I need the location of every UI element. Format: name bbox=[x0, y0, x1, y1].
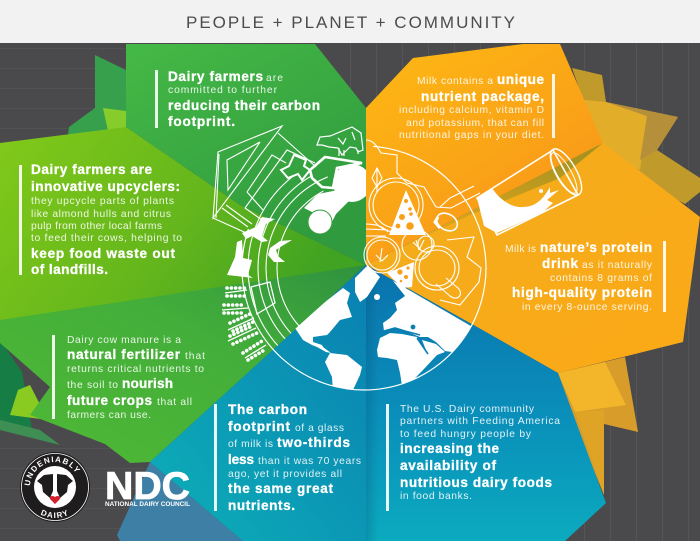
icon: cow in barn bbox=[281, 155, 310, 180]
bar: fertilizer bbox=[52, 335, 55, 419]
globe outer ring bbox=[232, 136, 496, 400]
text: fertilizer: Dairy cow manure is a bbox=[67, 335, 181, 346]
text: upcyclers: Dairy farmers are bbox=[31, 162, 152, 177]
text: upcyclers: pulp from other local farms bbox=[31, 221, 162, 232]
text: fertilizer: the soil to bbox=[67, 380, 118, 391]
text: unique nutrient package: including calcium, vitamin D bbox=[399, 105, 544, 116]
bar: nutrients bbox=[552, 74, 555, 138]
text: upcyclers: like almond hulls and citrus bbox=[31, 209, 171, 220]
text: dairy farmers carbon bbox=[168, 69, 320, 129]
text: feeding america bbox=[400, 404, 560, 502]
text: carbon footprint of milk: the same great bbox=[228, 481, 333, 496]
panel: feeding america blue bbox=[366, 265, 606, 541]
text: feeding america: increasing the bbox=[400, 441, 499, 456]
text: fertilizer bbox=[67, 335, 205, 421]
text: feeding america: to feed hungry people by bbox=[400, 429, 532, 440]
text: upcyclers bbox=[31, 162, 182, 277]
bar: protein bbox=[663, 241, 666, 312]
decorative shards: left bbox=[0, 340, 60, 445]
icon: mushroom bbox=[433, 210, 461, 234]
text: fertilizer: that all bbox=[157, 397, 192, 408]
bar: food banks bbox=[386, 404, 389, 511]
logo: Undeniably Dairy: UNDENIABLY bbox=[24, 456, 80, 486]
icon: milk glass bbox=[477, 144, 588, 235]
text: feeding america: partners with Feeding America bbox=[400, 416, 560, 427]
panel: lime upcycling bbox=[0, 127, 366, 321]
illustration: food plate bbox=[364, 140, 481, 305]
decorative shards: top left bbox=[68, 55, 126, 135]
text: carbon footprint of milk: than it was 70 years bbox=[258, 456, 361, 467]
text: feeding america: in food banks. bbox=[400, 491, 472, 502]
logo: Undeniably Dairy bbox=[20, 452, 90, 522]
small wheel bbox=[308, 210, 332, 234]
bar: footprint bbox=[214, 404, 217, 511]
text: feeding america: The U.S. Dairy community bbox=[400, 404, 535, 415]
icon: tree rows bbox=[222, 288, 266, 360]
bar: dairy farmers bbox=[155, 70, 158, 128]
panel: fertilizer green bbox=[0, 265, 366, 463]
center fold bbox=[366, 265, 378, 541]
bar: upcyclers bbox=[19, 165, 22, 275]
text: unique nutrient package: and potassium, that can fill bbox=[406, 118, 544, 129]
decorative shards: top right bbox=[572, 68, 700, 204]
icon: world globe bbox=[296, 266, 471, 389]
icon: left cows bbox=[227, 217, 292, 314]
text: fertilizer: returns critical nutrients to bbox=[67, 364, 204, 375]
panel: carbon footprint teal bbox=[150, 265, 366, 541]
text: dairy farmers carbon: committed to further bbox=[168, 85, 278, 96]
text: protein drink: contains 8 grams of bbox=[550, 273, 652, 284]
text: upcyclers: of landfills. bbox=[31, 262, 108, 277]
icon: tractor bbox=[304, 157, 371, 222]
text: carbon footprint of milk: footprint bbox=[228, 419, 290, 434]
text: carbon footprint of milk bbox=[228, 402, 361, 513]
panel: upper orange nutrients bbox=[366, 44, 603, 265]
text: upcyclers: to feed their cows, helping to bbox=[31, 233, 182, 244]
text: carbon footprint of milk: of milk is bbox=[228, 439, 273, 450]
text: upcyclers: they upcycle parts of plants bbox=[31, 196, 174, 207]
panel: carbon reduction green bbox=[126, 44, 366, 265]
arcs of the farm half bbox=[248, 176, 328, 346]
text: feeding america: nutritious dairy foods bbox=[400, 475, 552, 490]
text: carbon footprint of milk: of a glass bbox=[295, 423, 344, 434]
text: unique nutrient package: nutritional gaps in your diet. bbox=[399, 130, 544, 141]
text: protein drink bbox=[505, 240, 653, 313]
text: upcyclers: innovative upcyclers: bbox=[31, 179, 180, 194]
decorative shards: bottom right bbox=[558, 357, 638, 495]
text: carbon footprint of milk: nutrients. bbox=[228, 498, 295, 513]
panel: lower-left blue shadow bbox=[117, 462, 243, 541]
text: carbon footprint of milk: two-thirds bbox=[277, 435, 350, 450]
text: fertilizer: nourish bbox=[122, 376, 173, 391]
text: fertilizer: that bbox=[185, 351, 205, 362]
text: protein drink: nature’s protein bbox=[540, 240, 652, 255]
text: dairy farmers carbon: Dairy farmers bbox=[168, 69, 263, 84]
illustration: barn bbox=[213, 126, 316, 240]
text: protein drink: Milk is bbox=[505, 244, 536, 255]
text: protein drink: high-quality protein bbox=[512, 285, 652, 300]
text: fertilizer: farmers can use. bbox=[67, 410, 151, 421]
text: unique nutrient package: nutrient package, bbox=[421, 89, 544, 104]
text: dairy farmers carbon: are bbox=[266, 73, 283, 84]
text: unique nutrient package bbox=[399, 72, 544, 141]
text: carbon footprint of milk: ago, yet it provides all bbox=[228, 469, 342, 480]
text: unique nutrient package: Milk contains a bbox=[417, 76, 493, 87]
text: protein drink: drink bbox=[542, 256, 578, 271]
text: feeding america: availability of bbox=[400, 458, 496, 473]
logo: National Dairy Council: NATIONAL DAIRY COUNCIL bbox=[105, 502, 190, 508]
icon: cow top bbox=[317, 127, 363, 156]
text: dairy farmers carbon: footprint. bbox=[168, 114, 235, 129]
fold shadow orange bbox=[366, 143, 603, 265]
text: carbon footprint of milk: The carbon bbox=[228, 402, 307, 417]
header: title bar bbox=[0, 0, 700, 43]
text: dairy farmers carbon: reducing their carbon bbox=[168, 98, 320, 113]
text: carbon footprint of milk: less bbox=[228, 452, 254, 467]
text: protein drink: as it naturally bbox=[582, 260, 653, 271]
text: fertilizer: natural fertilizer bbox=[67, 347, 181, 362]
panel: lower orange protein bbox=[366, 143, 700, 373]
text: upcyclers: keep food waste out bbox=[31, 246, 175, 261]
text: fertilizer: future crops bbox=[67, 393, 152, 408]
text: protein drink: in every 8-ounce serving. bbox=[522, 302, 652, 313]
logo: National Dairy Council: NDC bbox=[105, 465, 190, 508]
header: title bar: PEOPLE + PLANET + COMMUNITY bbox=[186, 13, 515, 32]
text: unique nutrient package: unique bbox=[497, 72, 544, 87]
icon: pizza slices bbox=[387, 190, 426, 288]
logo: Undeniably Dairy: DAIRY bbox=[40, 510, 67, 518]
